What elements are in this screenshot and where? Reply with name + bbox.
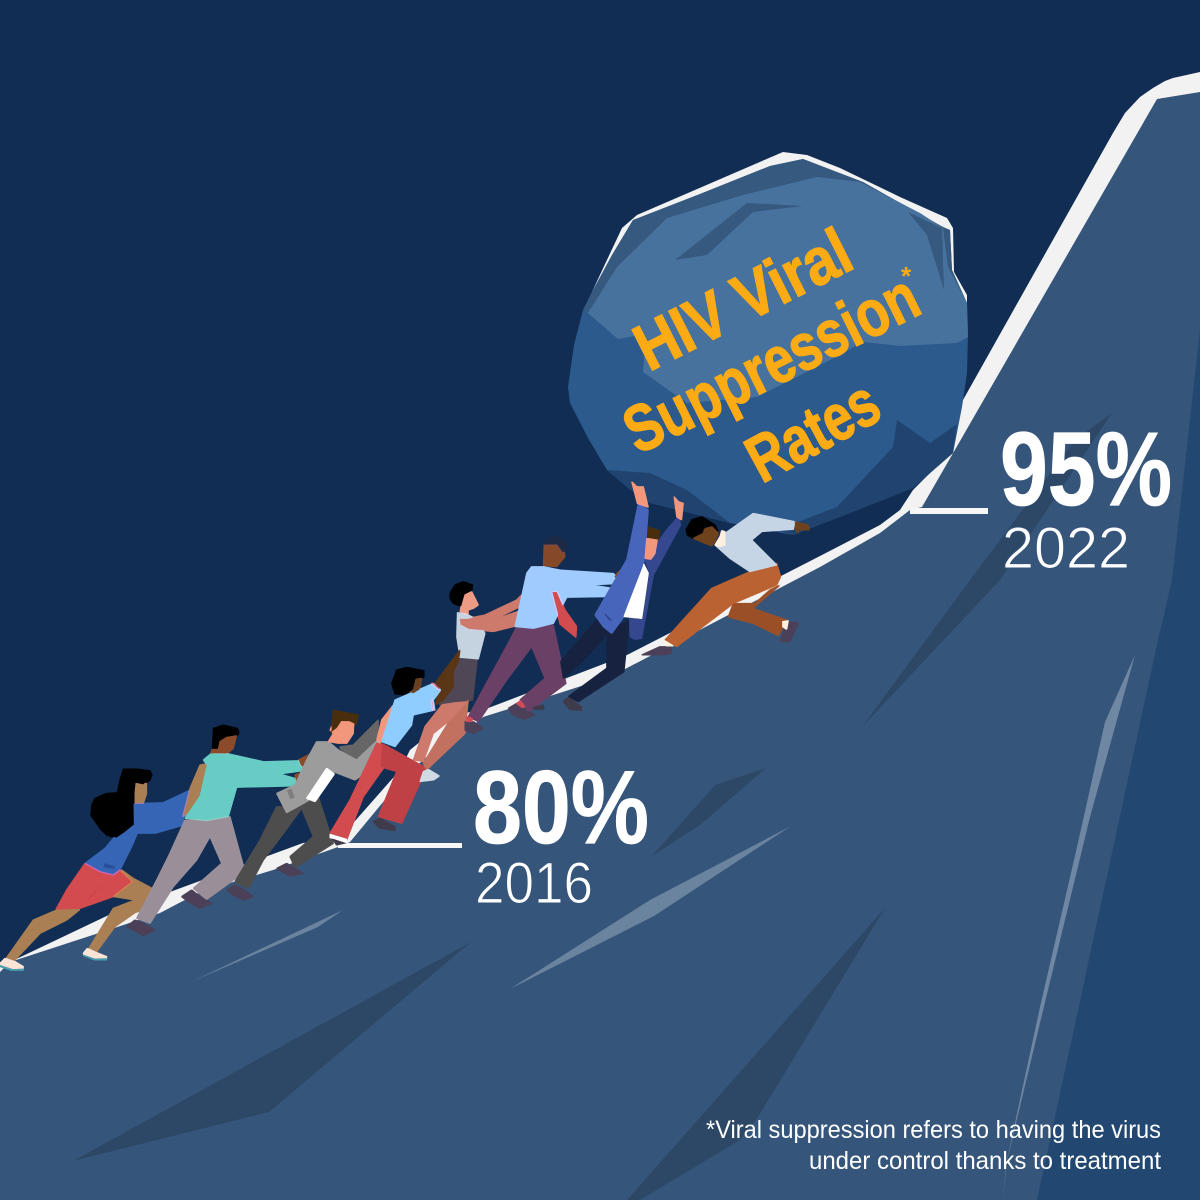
title line 2: Suppression <box>611 259 931 468</box>
person: man in grey suit <box>227 705 393 900</box>
person: lead man crouching in orange trousers <box>642 513 809 655</box>
person: woman in light blue top <box>382 650 460 747</box>
footnote line 2: under control thanks to treatment <box>809 1147 1161 1175</box>
white ridge edge <box>0 72 1200 975</box>
boulder facet shadow left <box>675 203 803 260</box>
title line 3: Rates <box>733 364 892 496</box>
title line 1: HIV Viral <box>622 213 863 384</box>
boulder body <box>568 159 968 535</box>
rock crack: lower centre <box>627 908 885 1200</box>
boulder <box>568 152 968 535</box>
person: man in teal sweater <box>127 725 315 936</box>
year: 2016 <box>475 851 593 916</box>
people pushing, lower group <box>0 705 427 970</box>
leader line <box>910 508 988 514</box>
boulder upper shade <box>583 159 967 313</box>
callout: 80% 2016 <box>338 750 649 916</box>
asterisk: * <box>901 261 912 291</box>
year: 2022 <box>1002 516 1130 581</box>
boulder dark base <box>777 420 957 535</box>
highlight: centre <box>510 826 791 989</box>
highlight: right <box>1003 655 1135 1200</box>
shaded right slope <box>1037 330 1200 1200</box>
person: man in blue jacket with raised arms <box>533 482 683 711</box>
leader line <box>338 843 462 848</box>
boulder white rim <box>592 152 967 320</box>
rock crack: lower left <box>73 942 471 1161</box>
value: 80% <box>473 750 649 866</box>
people pushing, upper group <box>382 482 809 782</box>
footnote <box>706 1116 1161 1175</box>
boulder dark base left <box>607 470 730 523</box>
person: woman's red trousers <box>330 743 427 845</box>
footnote line 1: *Viral suppression refers to having the virus <box>706 1116 1161 1144</box>
person: man in light blue shirt and purple trousers <box>465 536 628 733</box>
rock crack: long dark right <box>862 413 1112 727</box>
boulder light facet <box>588 177 968 403</box>
boulder facet shadow right <box>908 212 944 290</box>
highlight: small <box>193 910 343 981</box>
rock crack: small dark <box>652 768 766 856</box>
callout: 95% 2022 <box>910 411 1172 581</box>
boulder title <box>611 213 931 496</box>
person: woman in white top and skirt <box>413 582 531 782</box>
person: woman in blue and red <box>0 763 208 970</box>
